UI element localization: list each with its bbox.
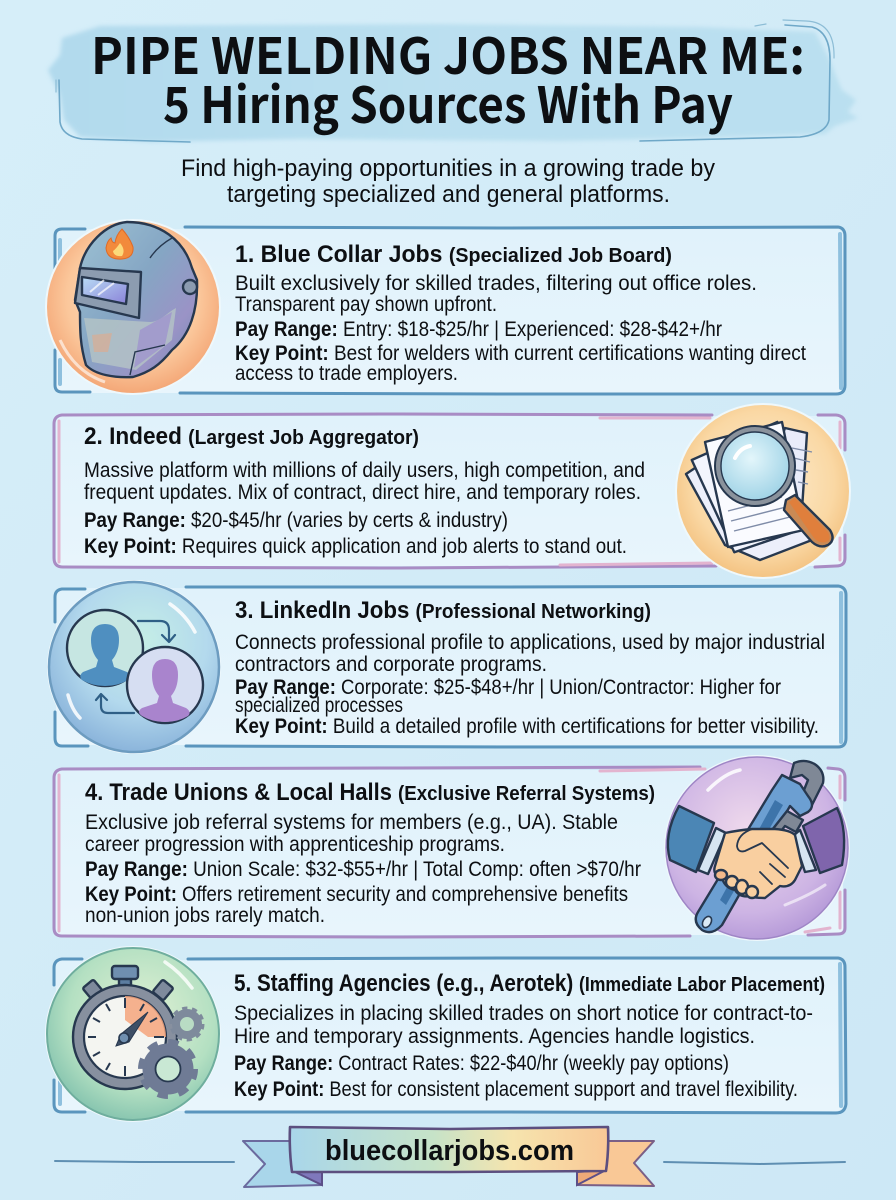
key point: Key Point: Build a detailed profile with certifications for better visibility. (235, 715, 819, 738)
description: Exclusive job referral systems for members (e.g., UA). Stable (85, 811, 618, 834)
heading: 4. Trade Unions & Local Halls (Exclusive Referral Systems) (85, 779, 655, 806)
title (91, 17, 805, 138)
subtitle: Find high-paying opportunities in a growing trade by (181, 155, 715, 182)
subtitle (181, 155, 715, 208)
key point (235, 342, 806, 385)
heading: 3. LinkedIn Jobs (Professional Networking) (235, 597, 651, 624)
website label: bluecollarjobs.com (325, 1135, 574, 1167)
pay range: Pay Range: Entry: $18-$25/hr | Experienced: $28-$42+/hr (235, 318, 722, 341)
description (234, 1002, 813, 1048)
pay range: Pay Range: $20-$45/hr (varies by certs & industry) (84, 509, 508, 532)
icon: magnifying glass over documents (675, 403, 851, 579)
heading: 1. Blue Collar Jobs (Specialized Job Board) (235, 241, 672, 268)
pay range (235, 676, 781, 717)
pay range: Pay Range: Corporate: $25-$48+/hr | Union/Contractor: Higher for (235, 676, 781, 699)
subtitle: targeting specialized and general platforms. (227, 181, 670, 208)
title banner: brush stroke (48, 20, 858, 142)
description: frequent updates. Mix of contract, direct hire, and temporary roles. (84, 481, 641, 504)
description: Transparent pay shown upfront. (235, 293, 497, 316)
description: career progression with apprenticeship programs. (85, 833, 505, 856)
key point: Key Point: Requires quick application and job alerts to stand out. (84, 535, 627, 558)
panel 4: Trade Unions & Local Halls (54, 755, 850, 941)
title: 5 Hiring Sources With Pay (163, 66, 733, 138)
key point: Key Point: Offers retirement security and comprehensive benefits (85, 883, 628, 906)
description: Massive platform with millions of daily users, high competition, and (84, 459, 645, 482)
icon: welding helmet (45, 219, 221, 395)
icon: networking profiles (47, 580, 221, 754)
pay range: specialized processes (235, 694, 403, 717)
pay range: Pay Range: Contract Rates: $22-$40/hr (weekly pay options) (234, 1052, 729, 1075)
panel 5: Staffing Agencies (45, 946, 846, 1122)
description: Hire and temporary assignments. Agencies handle logistics. (234, 1025, 755, 1048)
title: PIPE WELDING JOBS NEAR ME: (91, 17, 805, 89)
description (85, 811, 618, 856)
description: Connects professional profile to applications, used by major industrial (235, 631, 825, 654)
panel 2: Indeed (54, 403, 851, 579)
description: Specializes in placing skilled trades on short notice for contract-to- (234, 1002, 813, 1025)
panel 3: LinkedIn Jobs (47, 580, 846, 754)
key point: access to trade employers. (235, 362, 458, 385)
icon: handshake with pipe wrench (664, 755, 850, 941)
description: contractors and corporate programs. (235, 653, 547, 676)
key point: Key Point: Best for consistent placement support and travel flexibility. (234, 1078, 798, 1101)
heading: 2. Indeed (Largest Job Aggregator) (84, 423, 419, 450)
key point (85, 883, 628, 927)
pay range: Pay Range: Union Scale: $32-$55+/hr | Total Comp: often >$70/hr (85, 858, 641, 881)
description (235, 631, 825, 676)
key point: Key Point: Best for welders with current certifications wanting direct (235, 342, 806, 365)
footer ribbon (55, 1127, 845, 1187)
heading: 5. Staffing Agencies (e.g., Aerotek) (Immediate Labor Placement) (234, 970, 825, 997)
key point: non-union jobs rarely match. (85, 904, 325, 927)
panel 1: Blue Collar Jobs (45, 219, 845, 395)
icon: stopwatch and gears (45, 946, 221, 1122)
description (84, 459, 645, 504)
description (235, 272, 757, 316)
description: Built exclusively for skilled trades, filtering out office roles. (235, 272, 757, 295)
